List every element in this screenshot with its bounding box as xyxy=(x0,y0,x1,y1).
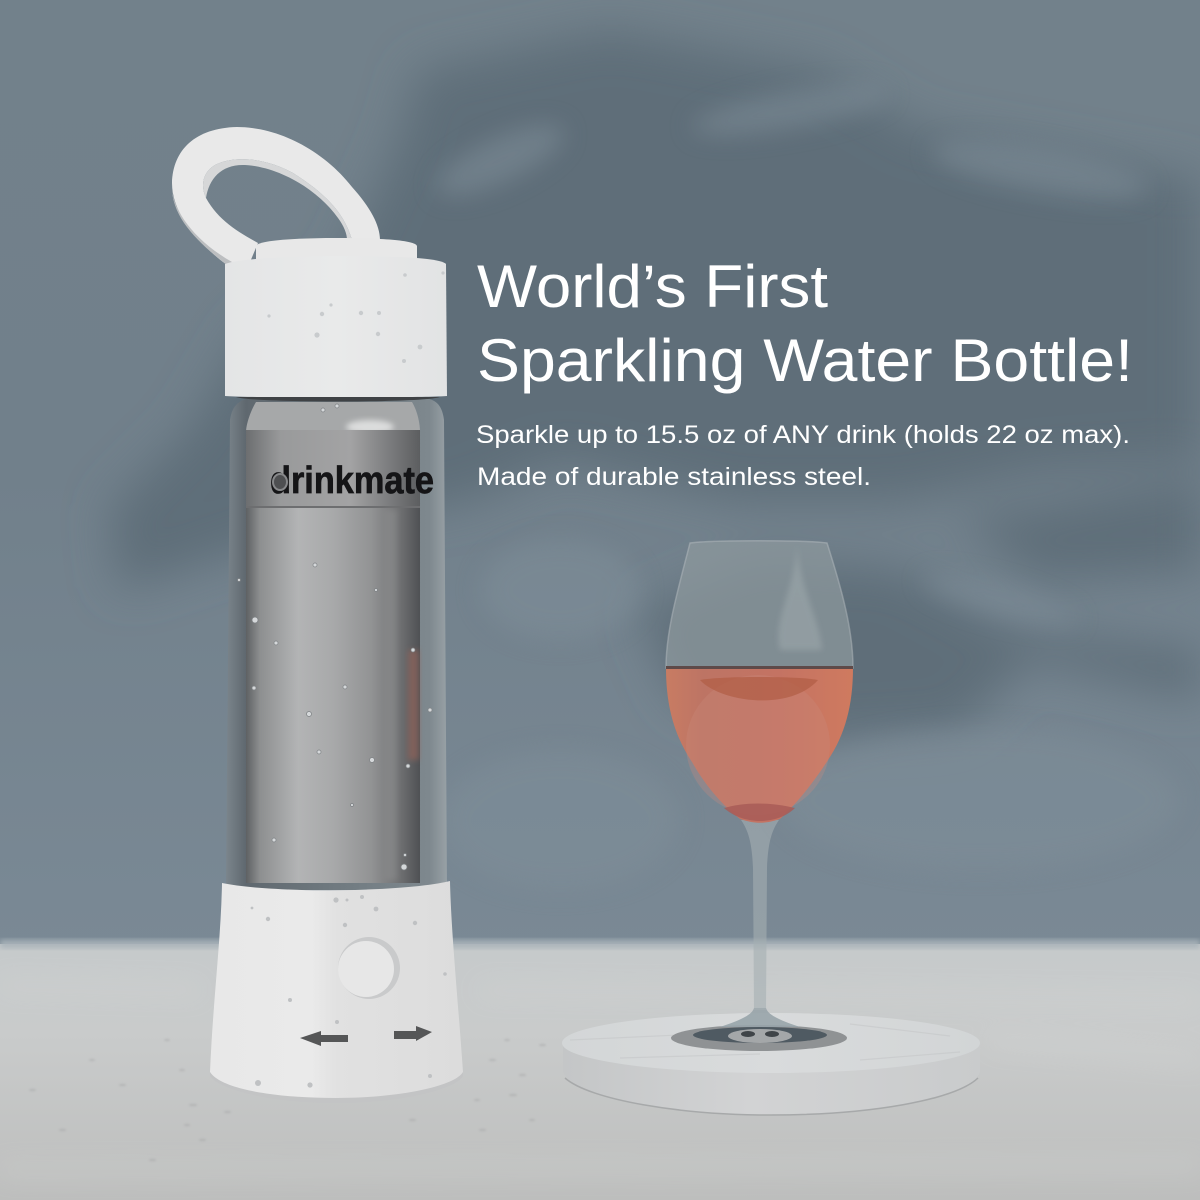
title xyxy=(477,253,1133,394)
icon: bottle loop handle xyxy=(172,127,417,265)
description xyxy=(476,421,1130,491)
button xyxy=(338,941,394,997)
icon: left arrow xyxy=(300,1031,348,1046)
logo text: drinkmate xyxy=(270,460,434,502)
wine glass xyxy=(666,541,853,1051)
button recess xyxy=(338,937,400,999)
bottle neck xyxy=(256,238,417,262)
title: World’s First xyxy=(477,253,828,320)
glass bowl xyxy=(666,541,853,668)
description: Sparkle up to 15.5 oz of ANY drink (holds 22 oz max). xyxy=(476,421,1130,449)
bottle cap xyxy=(225,256,447,402)
icon: logo swirl xyxy=(273,474,287,490)
table surface xyxy=(0,940,1200,1200)
description: Made of durable stainless steel. xyxy=(477,463,871,491)
background wall xyxy=(0,0,1200,950)
bottle body xyxy=(226,398,447,890)
water bottle xyxy=(172,127,463,1103)
icon: right arrow xyxy=(394,1026,432,1041)
wine liquid xyxy=(666,668,853,823)
glass stem xyxy=(741,820,779,1010)
bottle base xyxy=(210,881,463,1103)
glass foot xyxy=(671,1008,847,1051)
marble coaster xyxy=(562,1013,980,1115)
title: Sparkling Water Bottle! xyxy=(477,327,1133,394)
